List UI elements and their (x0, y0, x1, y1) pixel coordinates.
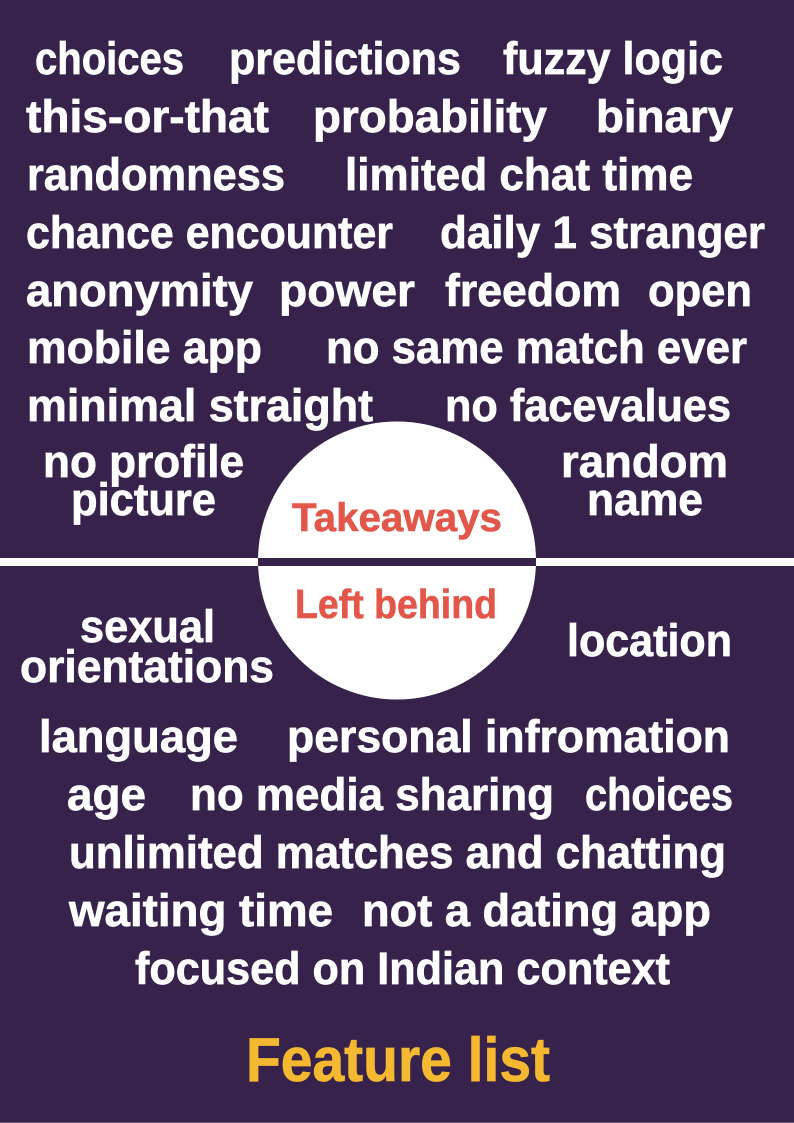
title: Feature list (246, 1026, 550, 1095)
takeaways word cloud: predictions (229, 33, 461, 84)
takeaways label: Takeaways (292, 496, 502, 540)
takeaways word cloud: binary (596, 91, 733, 142)
takeaways word cloud: anonymity (26, 265, 253, 316)
left behind word cloud: not a dating app (362, 885, 711, 936)
takeaways word cloud: randomness (27, 149, 285, 200)
takeaways word cloud: power (279, 265, 415, 316)
takeaways word cloud: random (561, 436, 728, 487)
left behind word cloud: sexual (80, 601, 215, 652)
takeaways word cloud: picture (71, 474, 216, 525)
takeaways word cloud: probability (313, 91, 547, 142)
takeaways word cloud: minimal straight (27, 380, 373, 431)
left behind word cloud (20, 601, 733, 994)
left behind word cloud: orientations (20, 641, 274, 692)
takeaways word cloud: no profile (43, 436, 244, 487)
takeaways word cloud: no facevalues (445, 380, 731, 431)
divider band (0, 558, 794, 566)
takeaways word cloud: chance encounter (26, 207, 393, 258)
takeaways word cloud: choices (35, 33, 184, 84)
left behind word cloud: language (39, 711, 238, 762)
left behind word cloud: no media sharing (190, 769, 554, 820)
takeaways word cloud: this-or-that (26, 91, 269, 142)
takeaways word cloud: name (587, 474, 703, 525)
takeaways word cloud: open (648, 265, 752, 316)
left behind word cloud: waiting time (68, 885, 333, 936)
left behind word cloud: location (567, 615, 732, 666)
left behind word cloud: focused on Indian context (135, 943, 670, 994)
left behind word cloud: unlimited matches and chatting (69, 827, 726, 878)
left behind word cloud: choices (585, 769, 733, 820)
takeaways word cloud: no same match ever (326, 322, 747, 373)
left behind label: Left behind (295, 581, 497, 627)
takeaways word cloud: freedom (445, 265, 621, 316)
takeaways word cloud: limited chat time (345, 149, 693, 200)
takeaways word cloud: mobile app (27, 322, 262, 373)
takeaways word cloud: fuzzy logic (503, 33, 723, 84)
central circle (258, 422, 536, 700)
left behind word cloud: age (67, 769, 146, 820)
takeaways word cloud (26, 33, 765, 525)
takeaways word cloud: daily 1 stranger (440, 207, 765, 258)
left behind word cloud: personal infromation (287, 711, 730, 762)
